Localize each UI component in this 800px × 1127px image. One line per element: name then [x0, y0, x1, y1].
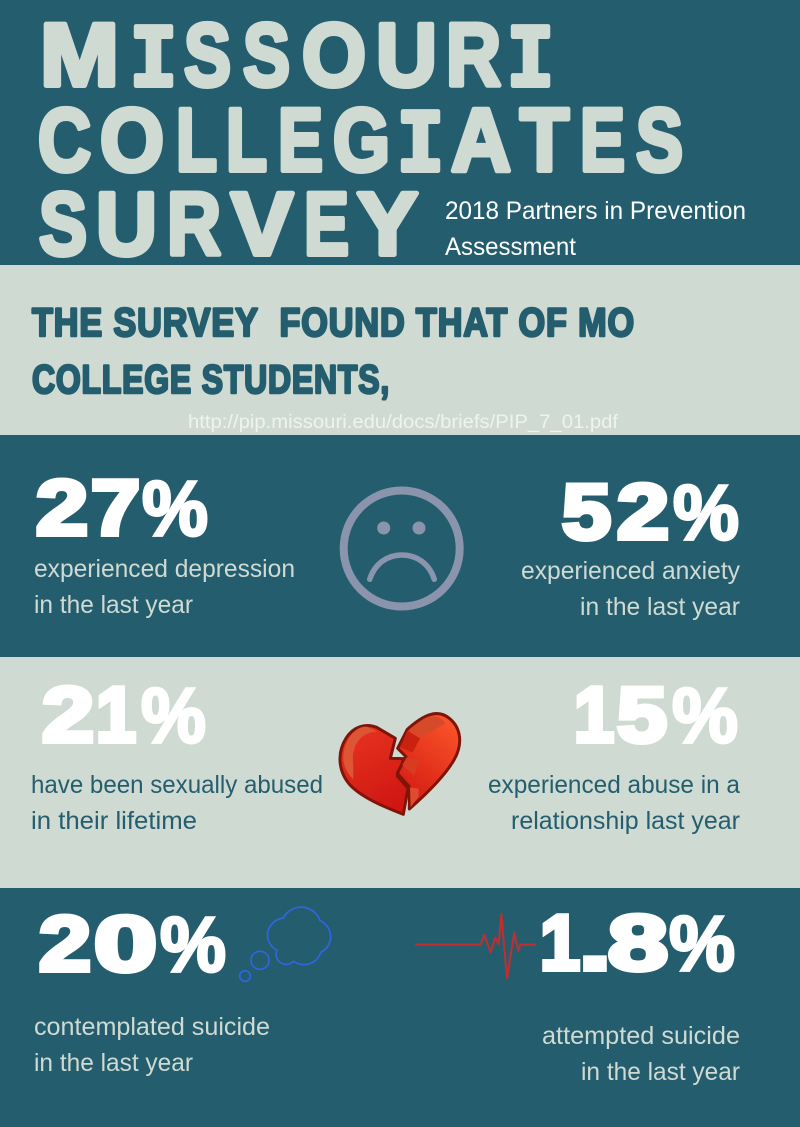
stat: 20% contemplated suicide: 0	[94, 900, 157, 988]
stat: 20% contemplated suicide: 2	[39, 900, 91, 988]
title: I	[397, 96, 444, 198]
stat: 1.8% attempted suicide: attempted suicide	[542, 1022, 740, 1050]
heading	[32, 301, 635, 402]
stat: 52% anxiety: %	[673, 468, 739, 556]
stat: 1.8% attempted suicide: in the last year	[581, 1058, 740, 1086]
stat: 52% anxiety: 5	[562, 468, 611, 556]
stat: 1.8% attempted suicide: %	[669, 900, 735, 988]
stat: 52% anxiety: 2	[617, 468, 669, 556]
title: S	[636, 90, 683, 190]
stat: 15% relationship abuse: 5	[617, 670, 667, 758]
title: S	[39, 174, 87, 274]
stat: 1.8% attempted suicide: .	[579, 898, 611, 986]
title: C	[38, 90, 91, 190]
title: L	[226, 90, 267, 190]
heading: THE SURVEY FOUND THAT OF MO	[32, 301, 635, 345]
title: M	[40, 4, 119, 104]
title: A	[451, 90, 511, 190]
title: V	[231, 174, 293, 274]
title: U	[376, 4, 437, 104]
title: I	[130, 12, 177, 112]
stat: 52% anxiety	[521, 468, 740, 621]
stat: 27% depression: in the last year	[34, 591, 193, 619]
stat: 27% depression: 7	[91, 464, 140, 552]
title	[38, 4, 683, 274]
stat: 27% depression	[34, 464, 295, 619]
stat: 15% relationship abuse: %	[672, 672, 738, 760]
stat: 1.8% attempted suicide: 1	[540, 898, 580, 986]
stat: 21% sexually abused	[31, 670, 323, 835]
heading: COLLEGE STUDENTS,	[32, 358, 390, 402]
title: R	[446, 4, 501, 104]
stat: 21% sexually abused: in their lifetime	[31, 807, 197, 835]
title: E	[304, 174, 349, 274]
title: S	[243, 4, 290, 104]
stat: 15% relationship abuse: relationship last year	[511, 807, 740, 835]
stat: 21% sexually abused: 2	[42, 670, 94, 758]
title: I	[507, 12, 554, 112]
subtitle	[445, 197, 746, 261]
stat: 21% sexually abused: 1	[96, 670, 136, 758]
stat: 20% contemplated suicide: contemplated suicide	[34, 1013, 270, 1041]
title: O	[100, 90, 164, 190]
icon: sad face	[344, 490, 460, 606]
subtitle: Assessment	[445, 233, 576, 261]
title: L	[176, 90, 217, 190]
title: E	[278, 90, 323, 190]
title: U	[96, 174, 157, 274]
subtitle: 2018 Partners in Prevention	[445, 197, 746, 225]
stat: 27% depression: 2	[36, 464, 88, 552]
title: G	[333, 90, 390, 190]
stat: 52% anxiety: in the last year	[580, 593, 740, 621]
title: R	[167, 174, 221, 274]
icon: heartbeat line	[415, 914, 536, 978]
stat: 27% depression: experienced depression	[34, 555, 295, 583]
title: Y	[357, 174, 418, 274]
icon: thought cloud	[240, 907, 331, 981]
title: T	[520, 90, 569, 190]
stat: 15% relationship abuse	[488, 670, 740, 835]
stat: 52% anxiety: experienced anxiety	[521, 557, 740, 585]
stat: 21% sexually abused: have been sexually abused	[31, 771, 323, 799]
icon: broken heart	[340, 714, 460, 814]
stat: 20% contemplated suicide: in the last year	[34, 1049, 193, 1077]
stat: 27% depression: %	[142, 464, 208, 552]
stat: 21% sexually abused: %	[141, 672, 206, 760]
stat: 1.8% attempted suicide	[540, 898, 740, 1086]
stat: 20% contemplated suicide	[34, 900, 270, 1077]
stat: 1.8% attempted suicide: 8	[608, 898, 668, 986]
title: O	[302, 4, 366, 104]
stat: 15% relationship abuse: 1	[574, 670, 614, 758]
title: S	[184, 4, 231, 104]
stat: 20% contemplated suicide: %	[160, 900, 226, 988]
title: E	[580, 90, 625, 190]
stat: 15% relationship abuse: experienced abuse in a	[488, 771, 740, 799]
source url: http://pip.missouri.edu/docs/briefs/PIP_7_01.pdf	[188, 412, 619, 433]
